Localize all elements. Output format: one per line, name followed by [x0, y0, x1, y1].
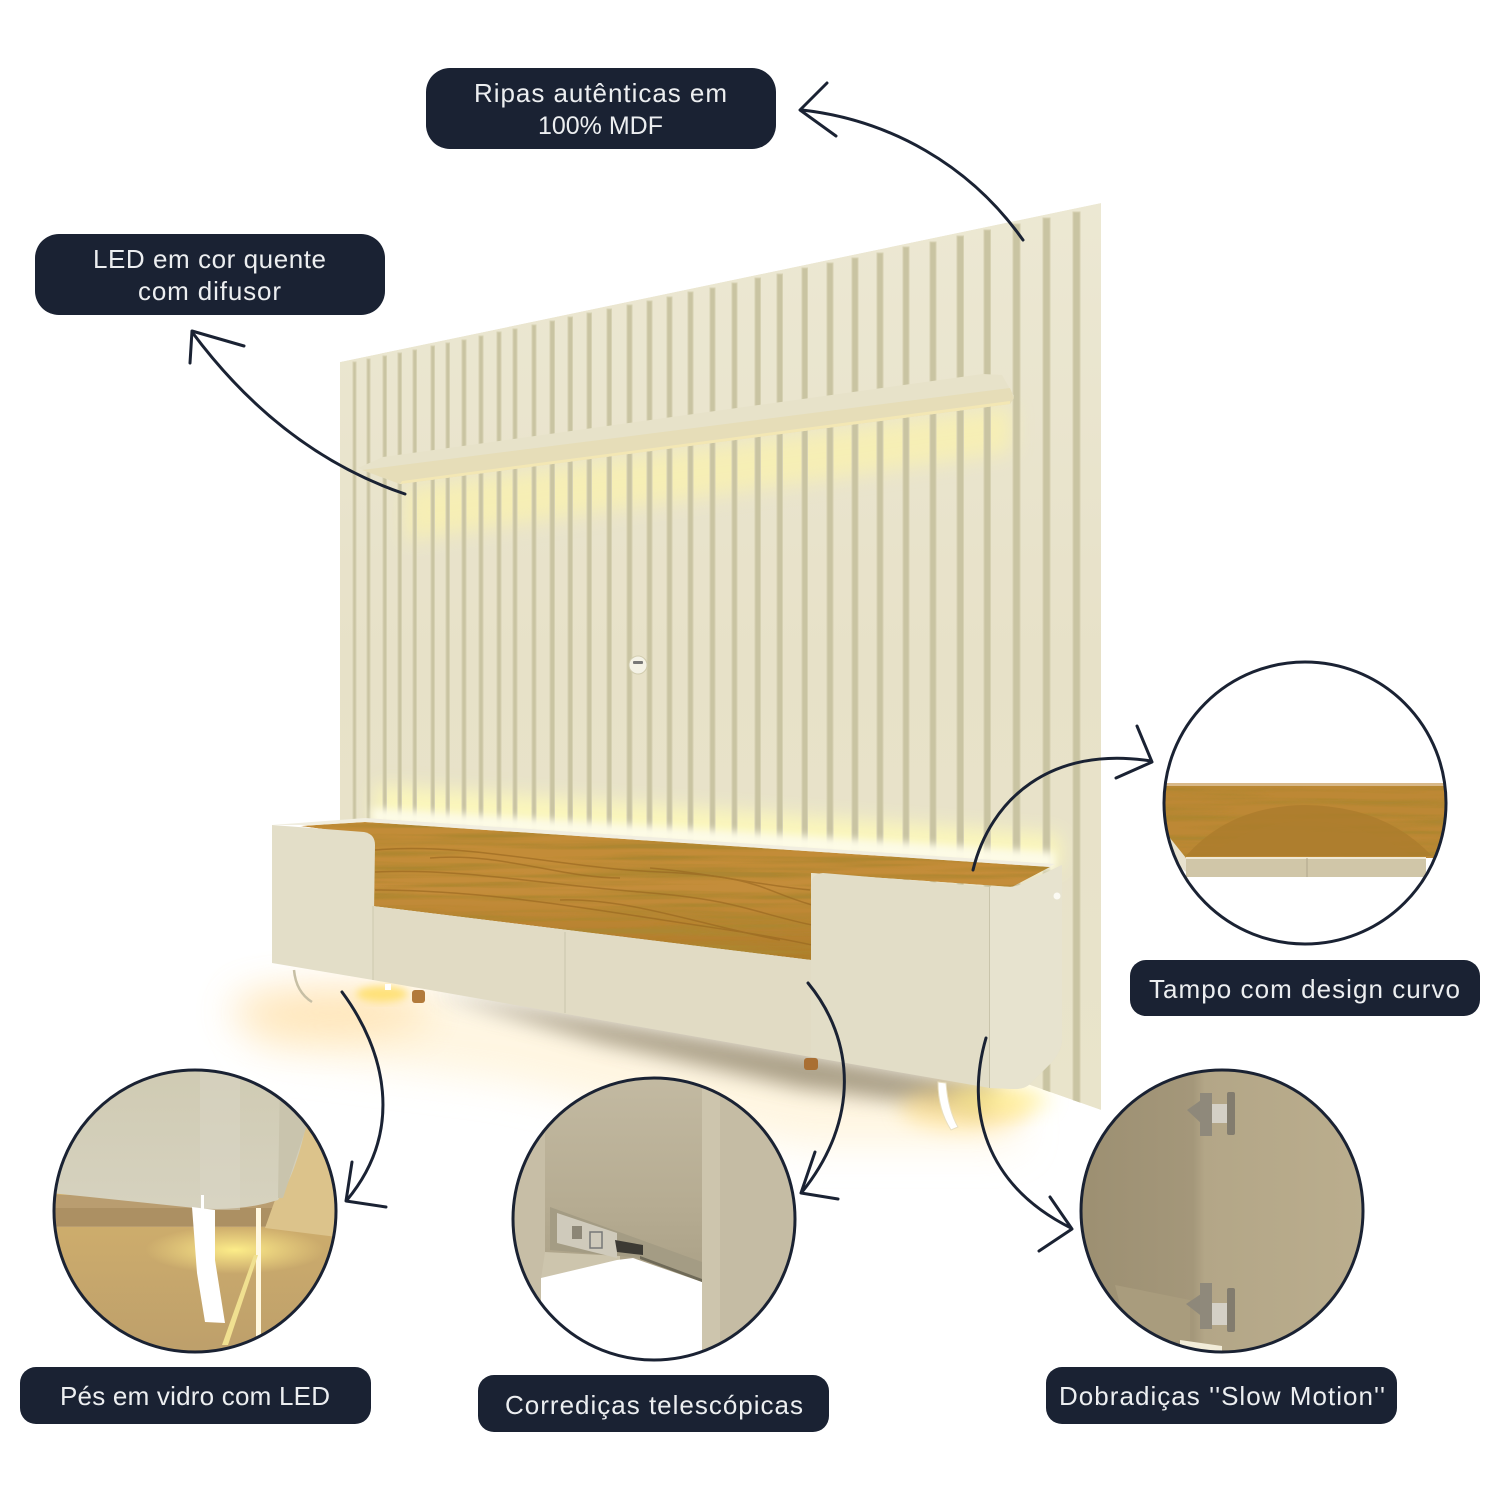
- arrow: ripas: [800, 83, 1023, 240]
- callout: dobradicas: [1046, 1367, 1397, 1424]
- callout: tampo: [1130, 960, 1480, 1016]
- detail circle: corredicas: [510, 1075, 800, 1365]
- TV cabinet: [272, 818, 1062, 1130]
- callout: corredicas: [478, 1375, 829, 1432]
- slatted wall panel: [340, 203, 1101, 1112]
- callout: ripas: 100% MDF: [538, 112, 663, 140]
- detail circle: pes em vidro: [50, 1060, 345, 1355]
- callout: dobradicas: Dobradiças ''Slow Motion'': [1059, 1381, 1385, 1411]
- arrow: pes: [342, 992, 386, 1207]
- arrow: LED: [190, 331, 405, 494]
- callout: ripas: Ripas autênticas em: [474, 78, 727, 108]
- cable outlet: [629, 656, 647, 674]
- callout: corredicas: Corrediças telescópicas: [505, 1390, 803, 1420]
- arrow: corredicas: [801, 983, 844, 1199]
- arrow: dobradicas: [978, 1038, 1072, 1251]
- floor glow and shadow: [230, 986, 1050, 1145]
- hinge top: [1187, 1092, 1235, 1136]
- wood back panel: [300, 822, 1050, 960]
- drawers: [373, 906, 811, 1057]
- callout: pes: [20, 1367, 371, 1424]
- right block: [811, 865, 1062, 1089]
- callout: LED: com difusor: [138, 276, 281, 306]
- callout: pes: Pés em vidro com LED: [60, 1381, 330, 1411]
- detail circle: tampo curvo: [1160, 660, 1450, 950]
- arrow: tampo: [973, 726, 1152, 870]
- callout: tampo: Tampo com design curvo: [1149, 974, 1460, 1004]
- hinge bottom: [1186, 1283, 1235, 1332]
- callout: ripas: [426, 68, 776, 149]
- callout: LED: LED em cor quente: [93, 244, 326, 274]
- detail circle: dobradicas: [1075, 1065, 1370, 1360]
- glass foot left: [294, 970, 312, 1002]
- callout: LED: [35, 234, 385, 315]
- glass foot right: [938, 1082, 958, 1130]
- floating shelf: [358, 374, 1014, 484]
- wooden feet: [412, 990, 425, 1003]
- cabinet top surface: [272, 818, 1055, 870]
- left block: [272, 825, 375, 980]
- LED glow above cabinet: [372, 808, 1055, 870]
